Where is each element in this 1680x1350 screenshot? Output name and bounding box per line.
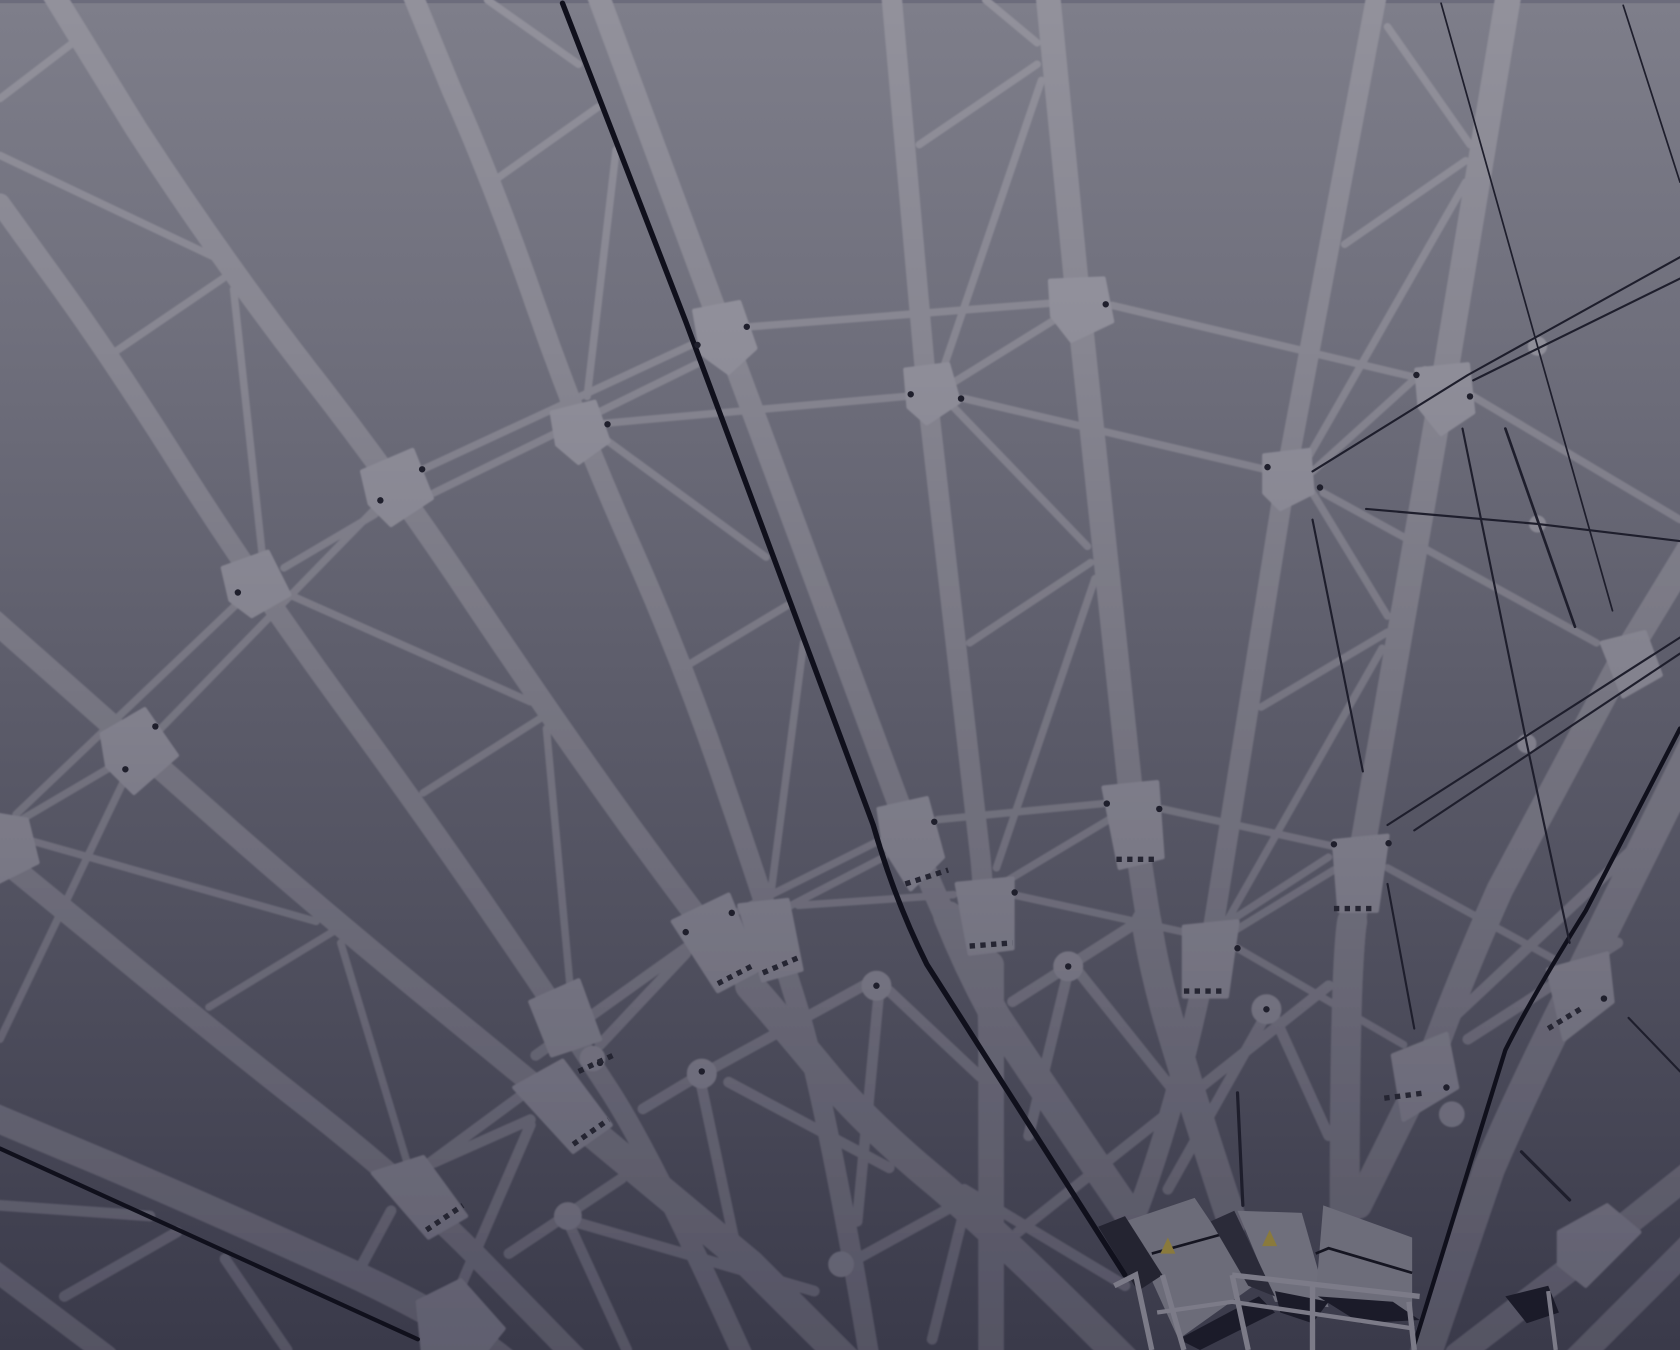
- equipment boxes: [1098, 1198, 1412, 1339]
- floodlights and railing: [1114, 1275, 1559, 1350]
- thickened lower tube sections: [557, 916, 1352, 1350]
- warning labels: [1160, 1230, 1277, 1254]
- clamp bands: [426, 859, 1584, 1230]
- box: centre: [1238, 1211, 1329, 1307]
- joint bolts: [122, 301, 1607, 1091]
- thin diagonal struts, lower: [0, 793, 1680, 1350]
- box: right: [1316, 1205, 1412, 1318]
- joint hubs: [0, 279, 1661, 1350]
- box: left: [1125, 1198, 1254, 1339]
- top edge band: [0, 0, 1680, 3]
